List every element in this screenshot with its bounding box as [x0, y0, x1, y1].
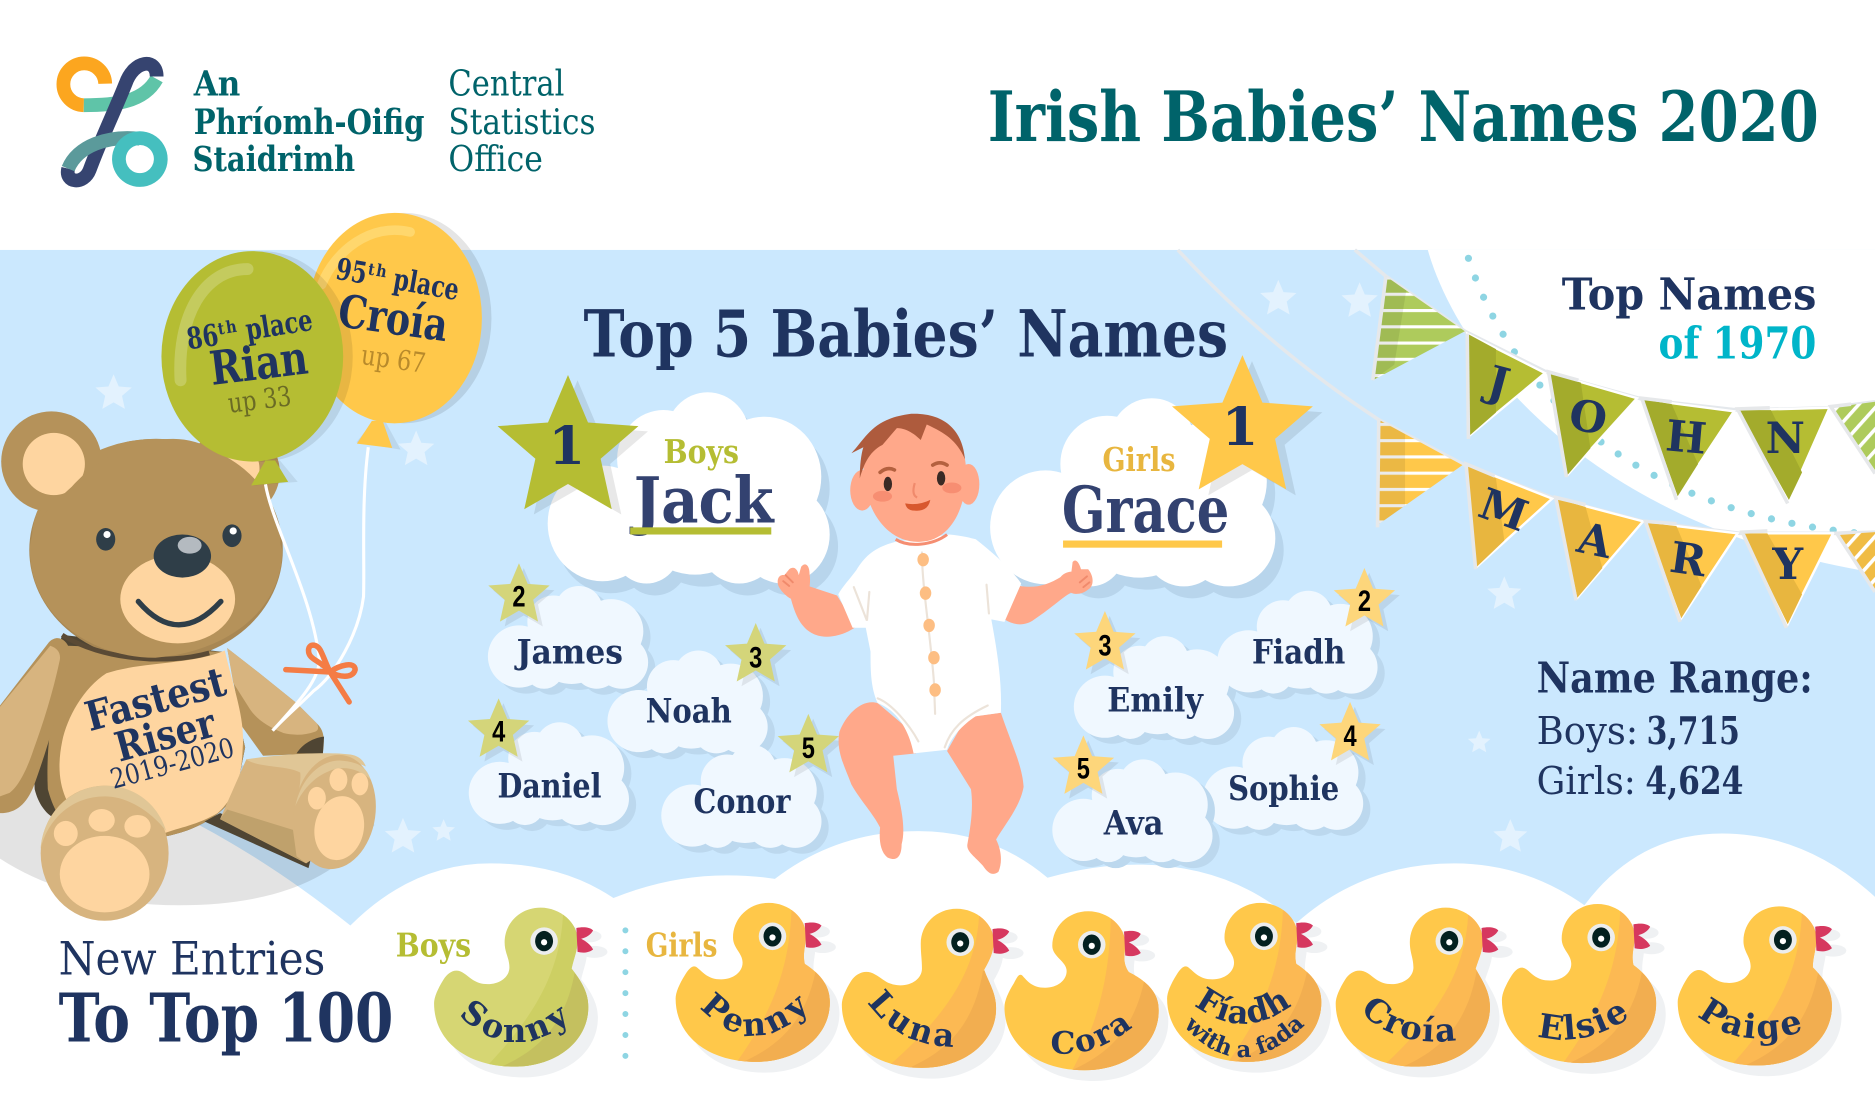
- flag R: [1645, 521, 1737, 622]
- baby onesie: [838, 535, 1021, 753]
- logo text: Irish: Phríomh-Oifig: [194, 102, 425, 143]
- flag J: [1467, 334, 1545, 439]
- star: boys 1: [498, 375, 648, 514]
- duck: Penny: [676, 902, 840, 1072]
- flag stripes right green: [1831, 402, 1875, 474]
- star 3 girls: 3: [1098, 629, 1111, 662]
- logo text: Irish: Staidrimh: [193, 139, 355, 180]
- bear eyes: [96, 524, 242, 551]
- New Entries heading: [59, 933, 393, 1058]
- cloud: James: James: [514, 633, 623, 672]
- Boys tag: Boys: [396, 927, 471, 965]
- flag A: [1556, 497, 1643, 600]
- flag H: [1642, 398, 1734, 500]
- background stars: [95, 280, 1527, 853]
- bear head: [1, 411, 283, 661]
- cloud: Ava: [1052, 759, 1220, 868]
- small clouds boys: [469, 586, 829, 854]
- bear shadow: [0, 765, 374, 905]
- star 4 girls: [1319, 702, 1386, 765]
- cloud: Sophie: Sophie: [1228, 769, 1339, 808]
- star 3 girls: [1074, 611, 1140, 674]
- duck: Croía: Croía: [1365, 998, 1456, 1042]
- star 5 boys: [778, 714, 844, 777]
- Name Range: Girls:: [1537, 759, 1636, 804]
- duck: Luna: Luna: [868, 988, 953, 1047]
- cloud: Conor: [661, 745, 829, 854]
- yellow balloon text: [333, 252, 462, 380]
- baby buttons: [917, 553, 941, 697]
- small ranked stars: [468, 563, 1400, 799]
- boys label: Boys: [664, 433, 739, 471]
- duck: Elsie: [1502, 904, 1666, 1074]
- duck: Cora: Cora: [1052, 1018, 1132, 1054]
- white corner behind bunting: [1428, 250, 1875, 573]
- baby ears: [850, 464, 979, 511]
- baby face: [873, 463, 961, 511]
- bear left foot: [41, 786, 169, 921]
- baby left hand: [778, 564, 810, 600]
- Top Names of 1970: [1562, 269, 1816, 370]
- duck: Elsie: Elsie: [1538, 1006, 1626, 1040]
- dotted arc: [1468, 258, 1875, 535]
- bear left ear: [1, 411, 102, 512]
- Name Range: 3,715: [1647, 709, 1740, 754]
- baby onesie seams: [854, 552, 989, 747]
- flag M: M: [1472, 479, 1534, 542]
- cloud: girls no.1: [990, 398, 1284, 598]
- yellow balloon text: Croía: [335, 283, 451, 352]
- heading: Top 5 Babies' Names: Top 5 Babies’ Names: [584, 296, 1228, 372]
- cloud: Ava: Ava: [1103, 804, 1164, 843]
- star 2 boys: [488, 563, 554, 626]
- duck: Fíadh with a fada: Fíadh: [1195, 986, 1292, 1024]
- dotted divider: [623, 930, 628, 1062]
- Top Names of 1970: Top Names: [1562, 269, 1816, 321]
- small clouds girls: [1052, 591, 1385, 868]
- cloud: Daniel: [469, 722, 636, 831]
- bear smile: [138, 601, 221, 625]
- cloud: Daniel: Daniel: [497, 767, 601, 806]
- flag stripes right yellow: [1837, 532, 1875, 592]
- duck: Fíadh with a fada: [1167, 902, 1331, 1072]
- flag Y: [1742, 531, 1833, 628]
- bear label: Fastest Riser 2019-2020: 2019-2020: [107, 732, 238, 796]
- logo mark: [63, 63, 161, 180]
- name: Jack: Jack: [629, 463, 775, 538]
- duck: Luna: [842, 908, 1024, 1078]
- baby left arm: [790, 586, 856, 637]
- green balloon text: [184, 303, 315, 420]
- star 5 girls: [1053, 735, 1119, 799]
- star 2 girls: 2: [1358, 585, 1371, 618]
- bear right ear: [189, 427, 280, 518]
- cloud: Noah: Noah: [646, 691, 732, 730]
- star 2 girls: [1334, 568, 1400, 631]
- green balloon text: Rian: [207, 329, 311, 396]
- bear nose: [154, 535, 211, 578]
- bear belly: [59, 651, 243, 833]
- balloon strings: [265, 447, 368, 731]
- bottom white cloud band: [0, 765, 1875, 1095]
- star 4 boys: [468, 698, 534, 762]
- star: girls 1: 1: [1222, 397, 1258, 458]
- flag O: O: [1565, 390, 1611, 446]
- bunting: bottom row MARY: [1378, 420, 1875, 628]
- star: boys 1: 1: [549, 416, 585, 477]
- baby hair: [851, 414, 965, 478]
- flag R: R: [1667, 533, 1710, 588]
- bear right foot pads: [308, 768, 370, 865]
- duck: Sonny: [434, 908, 608, 1078]
- bear body: [34, 635, 245, 837]
- baby head: [863, 416, 966, 542]
- logo text: English: Central: [448, 64, 564, 105]
- flag Y: Y: [1771, 540, 1804, 590]
- bear label: Fastest Riser 2019-2020: [80, 657, 238, 796]
- baby collar: [896, 535, 947, 544]
- logo text: Irish: [193, 64, 425, 180]
- yellow balloon: Croía: [307, 213, 491, 450]
- baby right leg: [947, 713, 1024, 874]
- bunting strings: [1178, 250, 1875, 533]
- duck: Paige: Paige: [1698, 996, 1800, 1046]
- flag stripes left yellow: [1378, 420, 1462, 527]
- star: girls 1: [1172, 355, 1322, 495]
- orange bow: [286, 645, 355, 702]
- Name Range: Boys:: [1537, 709, 1638, 754]
- baby: [778, 414, 1093, 874]
- cloud: Fiadh: Fiadh: [1252, 633, 1345, 672]
- bear left foot pads: [54, 809, 151, 912]
- star 4 boys: 4: [492, 715, 506, 748]
- Top Names of 1970: of 1970: [1659, 318, 1816, 370]
- flag J: J: [1478, 356, 1515, 410]
- cloud: Fiadh: [1217, 591, 1385, 700]
- baby left leg: [839, 702, 916, 859]
- star 5 boys: 5: [802, 732, 815, 765]
- cloud: Emily: [1074, 636, 1241, 745]
- cloud: James: [488, 586, 655, 695]
- green balloon text: 86ᵗʰ place: [184, 303, 315, 357]
- bunting: top row JOHN: [1373, 276, 1875, 503]
- bear label: Fastest Riser 2019-2020: Fastest: [80, 657, 231, 741]
- star 5 girls: 5: [1077, 752, 1090, 785]
- star 4 girls: 4: [1343, 720, 1357, 753]
- flag M: [1466, 464, 1552, 569]
- logo text: English: [448, 64, 596, 180]
- Girls tag: Girls: [646, 927, 717, 965]
- duck: Sonny: Sonny: [461, 1000, 566, 1042]
- flag A: A: [1572, 513, 1617, 569]
- bear right leg: [204, 753, 366, 868]
- bear muzzle: [120, 555, 235, 643]
- cloud: Noah: [607, 651, 775, 759]
- New Entries heading: To Top 100: [59, 979, 393, 1058]
- baby finger lines: [783, 575, 1089, 587]
- Name Range: Name Range:: [1537, 653, 1813, 702]
- Name Range: [1537, 653, 1813, 804]
- name: Grace: Grace: [1062, 472, 1229, 547]
- bear left arm: [0, 638, 69, 813]
- bear label: Fastest Riser 2019-2020: Riser: [110, 699, 221, 771]
- duck: Croía: [1336, 908, 1512, 1078]
- New Entries heading: New Entries: [59, 933, 325, 986]
- blue background panel: [0, 250, 1875, 1095]
- star 3 boys: 3: [749, 641, 762, 674]
- yellow balloon text: 95ᵗʰ place: [333, 252, 462, 308]
- green balloon: Rian: [161, 251, 353, 485]
- teddy bear: [0, 411, 383, 921]
- bear right foot: [287, 749, 383, 874]
- flag N: N: [1766, 414, 1805, 464]
- cloud: boys no.1: [548, 392, 838, 595]
- Name Range: 4,624: [1645, 759, 1743, 804]
- flag N: [1737, 408, 1830, 503]
- flag H: H: [1664, 411, 1709, 465]
- baby right arm: [1004, 576, 1076, 624]
- baby right hand: [1059, 560, 1093, 594]
- cloud: Sophie: [1203, 727, 1370, 836]
- logo text: English: Statistics: [448, 102, 596, 143]
- flag stripes left green: [1373, 276, 1465, 380]
- logo text: Irish: An: [193, 64, 240, 105]
- cloud: Emily: Emily: [1107, 681, 1204, 720]
- duck: Penny: Penny: [700, 991, 806, 1036]
- yellow balloon text: up 67: [359, 339, 428, 380]
- cloud: Conor: Conor: [694, 782, 791, 821]
- duck: Cora: [1004, 911, 1168, 1081]
- girls label: Girls: [1103, 441, 1175, 479]
- flag O: [1549, 372, 1637, 477]
- duck: Fíadh with a fada: with a fada: [1186, 1017, 1305, 1058]
- logo text: English: Office: [448, 139, 543, 180]
- green balloon text: up 33: [226, 380, 293, 420]
- bear right arm: [227, 648, 324, 756]
- star 2 boys: 2: [512, 580, 526, 613]
- star 3 boys: [725, 623, 791, 686]
- duck: Paige: [1678, 906, 1846, 1076]
